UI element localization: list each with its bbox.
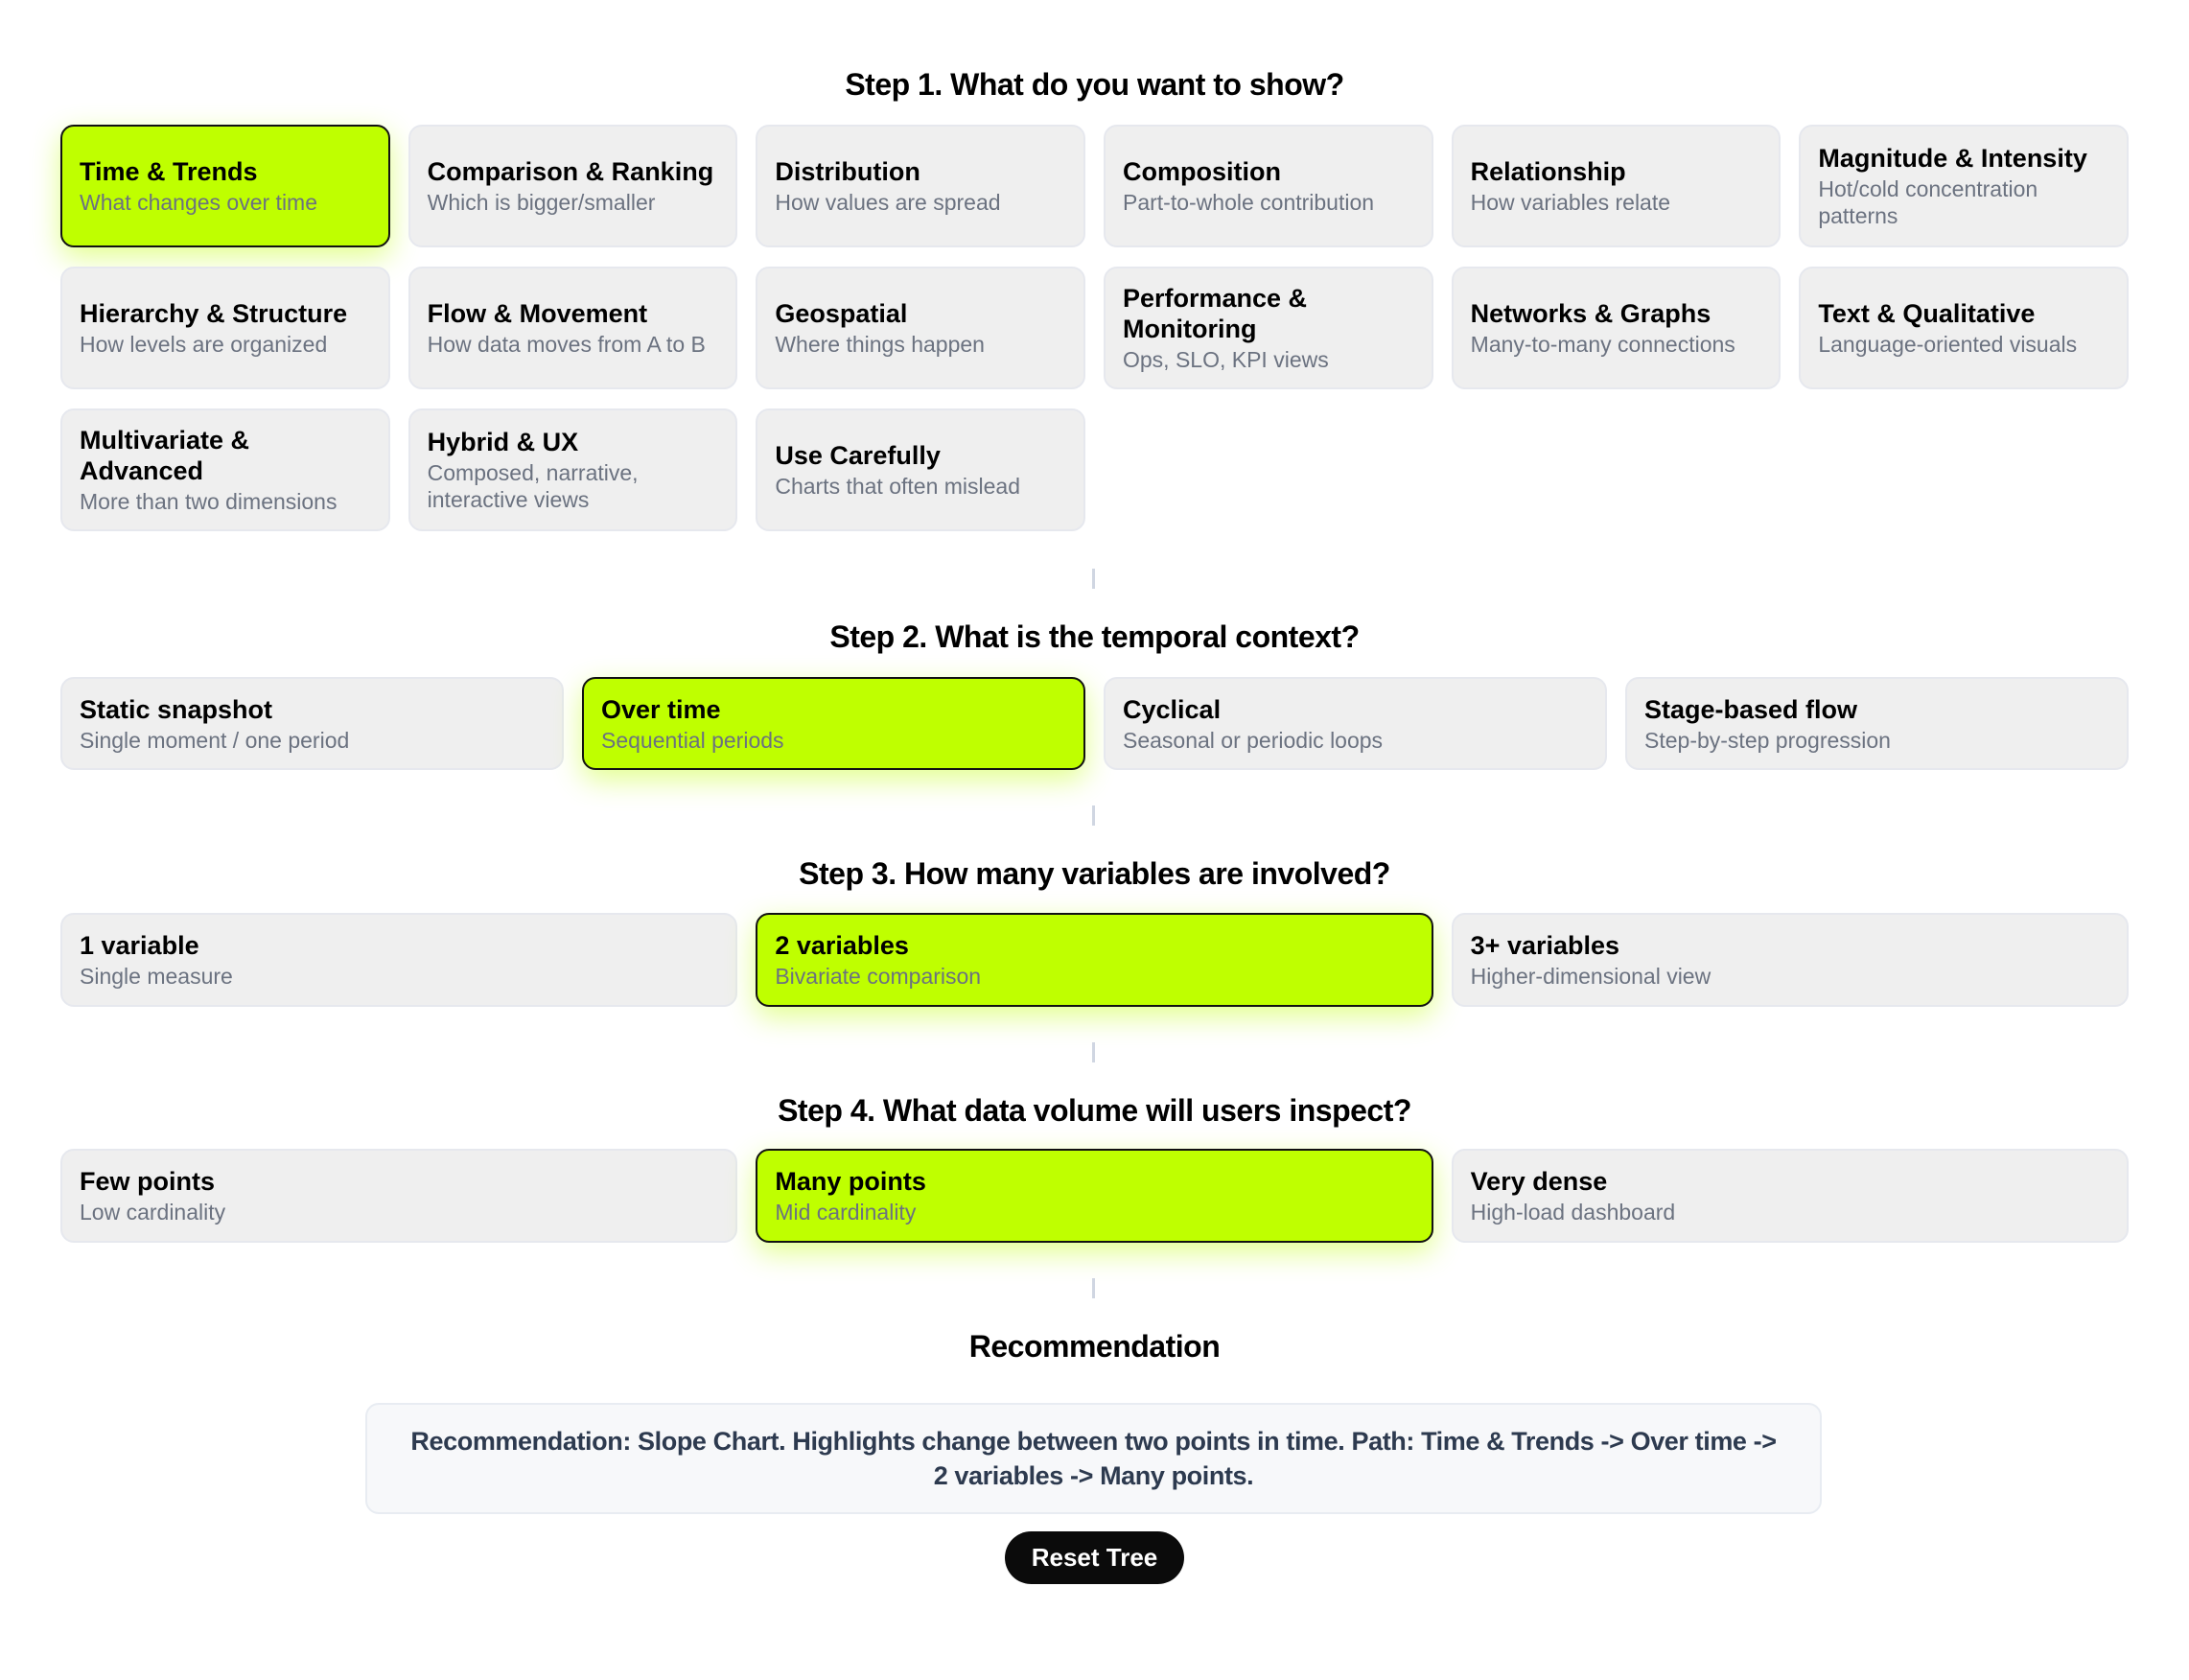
recommendation box: Recommendation: Slope Chart. Highlights change between two points in time. Path: Time & Trends -> Over time -> [410,1427,1777,1456]
card: stage-based [1625,677,2129,770]
card: time & trends (selected): Time & Trends [80,157,258,186]
panel: step 4 options [60,1139,2129,1272]
card: text: Language-oriented visuals [1818,332,2077,357]
card: performance: Performance & Monitoring [1123,284,1307,343]
card: use carefully: Use Carefully [775,441,941,470]
card: 3+ variables [1452,913,2129,1007]
card: 2 variables (selected) [756,913,1433,1007]
card: few points [60,1149,737,1243]
card: composition [1104,125,1433,247]
card: comparison: Which is bigger/smaller [428,190,655,215]
card: time & trends (selected): What changes over time [80,190,317,215]
card: geospatial: Where things happen [775,332,985,357]
card: time & trends (selected) [60,125,390,247]
card: hierarchy: How levels are organized [80,332,327,357]
card: few points: Few points [80,1167,215,1196]
card: 2 variables (selected): 2 variables [775,931,909,960]
card: flow: How data moves from A to B [428,332,706,357]
card: 3+ variables: 3+ variables [1471,931,1619,960]
card: hybrid: Hybrid & UX [428,428,578,456]
heading: step 3: Step 3. How many variables are involved? [799,856,1390,891]
card: few points: Low cardinality [80,1200,225,1225]
card: 1 variable [60,913,737,1007]
card: relationship: How variables relate [1471,190,1670,215]
card: multivariate: Multivariate & Advanced [80,426,249,485]
panel: step 1 options [40,115,2129,531]
card: magnitude [1799,125,2129,247]
button: reset tree [1005,1531,1184,1584]
card: distribution [756,125,1085,247]
card: many points (selected): Mid cardinality [775,1200,916,1225]
card: over time (selected): Sequential periods [601,727,784,752]
card: magnitude: Magnitude & Intensity [1818,144,2087,173]
card: cyclical [1104,677,1607,770]
card: geospatial [756,267,1085,389]
card: relationship [1452,125,1781,247]
card: cyclical: Seasonal or periodic loops [1123,727,1383,752]
card: very dense: High-load dashboard [1471,1200,1675,1225]
card: 1 variable: Single measure [80,964,233,989]
panel: step 2 options [60,667,2129,800]
card: networks: Many-to-many connections [1471,332,1735,357]
card: geospatial: Geospatial [775,299,907,328]
card: comparison: Comparison & Ranking [428,157,713,186]
card: multivariate: More than two dimensions [80,489,337,514]
card: very dense: Very dense [1471,1167,1607,1196]
card: static: Single moment / one period [80,727,349,752]
card: hierarchy: Hierarchy & Structure [80,299,347,328]
heading: recommendation: Recommendation [969,1329,1220,1364]
card: 1 variable: 1 variable [80,931,199,960]
card: hybrid: Composed, narrative, interactive views [428,460,639,512]
card: cyclical: Cyclical [1123,694,1221,723]
card: hybrid [408,408,737,531]
card: very dense [1452,1149,2129,1243]
card: stage-based: Step-by-step progression [1644,727,1891,752]
card: relationship: Relationship [1471,157,1626,186]
card: distribution: How values are spread [775,190,1001,215]
card: many points (selected) [756,1149,1433,1243]
card: hierarchy [60,267,390,389]
card: use carefully: Charts that often mislead [775,474,1020,499]
heading: step 1: Step 1. What do you want to show? [845,67,1344,102]
card: distribution: Distribution [775,157,920,186]
card: over time (selected): Over time [601,694,721,723]
card: many points (selected): Many points [775,1167,926,1196]
card: 3+ variables: Higher-dimensional view [1471,964,1711,989]
heading: step 2: Step 2. What is the temporal context? [829,619,1360,654]
card: networks [1452,267,1781,389]
card: over time (selected) [582,677,1085,770]
card: performance: Ops, SLO, KPI views [1123,347,1329,372]
card: flow: Flow & Movement [428,299,647,328]
panel: step 3 options [60,903,2129,1036]
recommendation box: 2 variables -> Many points. [934,1461,1253,1490]
button: reset tree: Reset Tree [1032,1543,1157,1572]
card: composition: Part-to-whole contribution [1123,190,1374,215]
card: composition: Composition [1123,157,1281,186]
card: multivariate [60,408,390,531]
recommendation box [365,1403,1822,1514]
card: static [60,677,564,770]
card: networks: Networks & Graphs [1471,299,1711,328]
card: performance [1104,267,1433,389]
card: comparison [408,125,737,247]
card: magnitude: Hot/cold concentration patterns [1818,176,2038,228]
card: stage-based: Stage-based flow [1644,694,1857,723]
card: flow [408,267,737,389]
card: text: Text & Qualitative [1818,299,2035,328]
card: static: Static snapshot [80,694,272,723]
heading: step 4: Step 4. What data volume will users inspect? [778,1093,1411,1128]
card: text [1799,267,2129,389]
card: use carefully [756,408,1085,531]
card: 2 variables (selected): Bivariate comparison [775,964,981,989]
